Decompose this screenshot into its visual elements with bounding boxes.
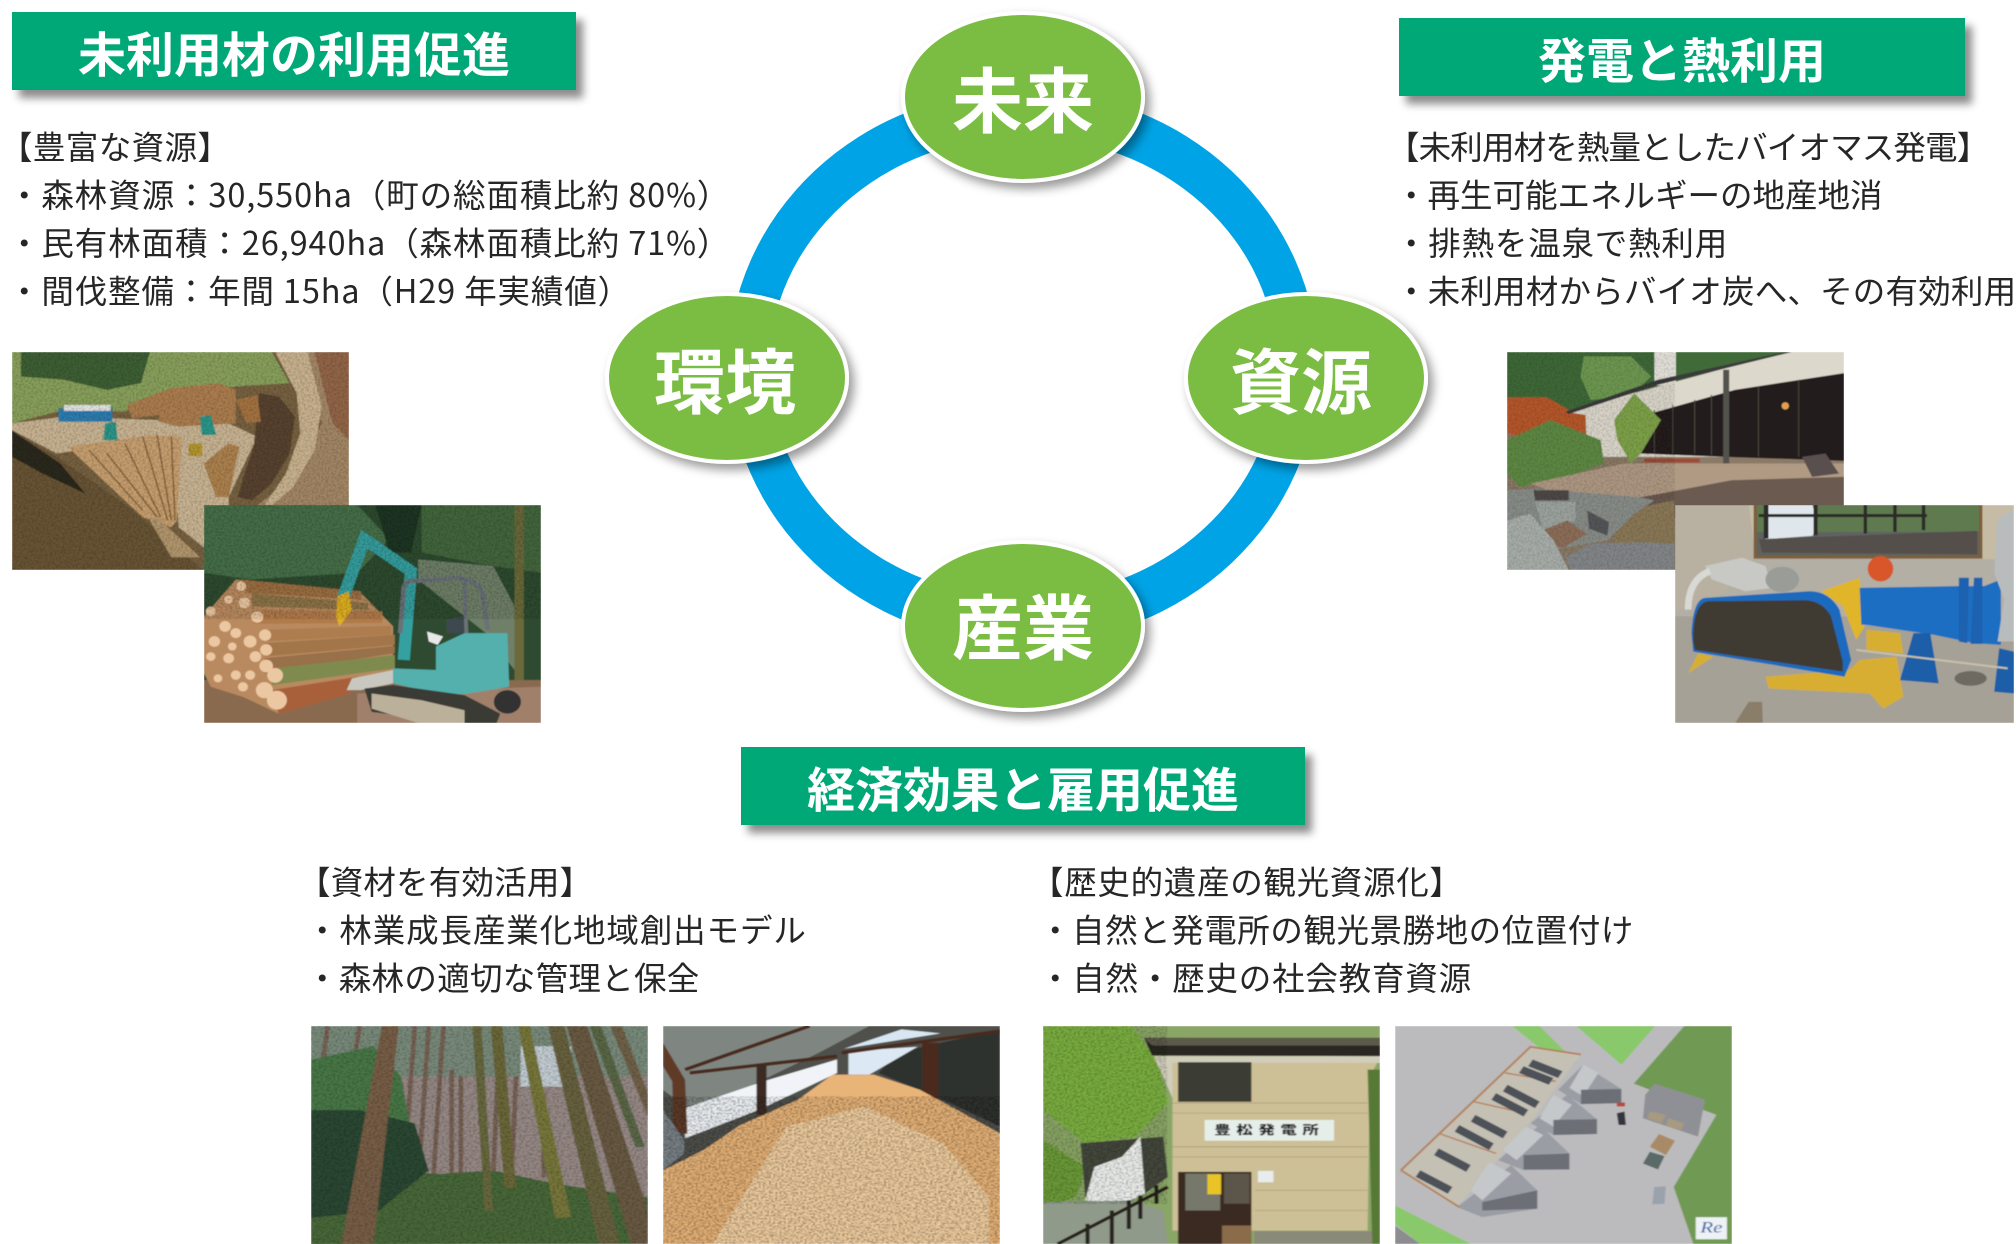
- photo: Toyomatsu power station: 豊松発電所: [1214, 1121, 1324, 1138]
- node: 資源: [1186, 294, 1426, 462]
- node: 産業: [903, 542, 1143, 710]
- photo: logs and teal excavator: [204, 505, 541, 723]
- text block: 資材を有効活用: ・林業成長産業化地域創出モデル: [306, 905, 807, 952]
- text block: 豊富な資源: ・間伐整備：年間 15ha（H29 年実績値）: [8, 266, 631, 313]
- heading: 発電と熱利用: [1399, 18, 1965, 96]
- text block: 歴史的遺産の観光資源化: 【歴史的遺産の観光資源化】: [1031, 857, 1463, 904]
- photo: blue biomass generator machine: [1675, 505, 2014, 723]
- blue ring: [728, 90, 1318, 644]
- text block: 豊富な資源: 【豊富な資源】: [0, 122, 230, 169]
- photo: cedar forest: [311, 1026, 648, 1244]
- text block: バイオマス発電: [1387, 122, 2016, 313]
- text block: 資材を有効活用: [298, 857, 807, 1000]
- text block: 資材を有効活用: ・森林の適切な管理と保全: [306, 953, 700, 1000]
- node: 未来: 未来: [952, 46, 1094, 148]
- text block: バイオマス発電: ・未利用材からバイオ炭へ、その有効利用: [1395, 266, 2016, 313]
- text block: バイオマス発電: 【未利用材を熱量としたバイオマス発電】: [1387, 122, 1988, 169]
- heading: 発電と熱利用: 発電と熱利用: [1538, 22, 1826, 92]
- node: 産業: 産業: [952, 573, 1094, 675]
- panel: central cycle diagram: [604, 10, 1440, 724]
- heading: 未利用材の利用促進: 未利用材の利用促進: [78, 16, 510, 86]
- text block: 豊富な資源: ・森林資源：30,550ha（町の総面積比約 80%）: [8, 170, 730, 217]
- photo: hot spring building and rock garden: [1507, 352, 1844, 570]
- text block: バイオマス発電: ・排熱を温泉で熱利用: [1395, 218, 1728, 265]
- node: 環境: [607, 294, 847, 462]
- node: 環境: 環境: [654, 327, 796, 429]
- node: 資源: 資源: [1230, 327, 1372, 429]
- text block: 歴史的遺産の観光資源化: [1031, 857, 1634, 1000]
- photo: 3D rendering of power plant site: [1395, 1026, 1732, 1244]
- text block: 歴史的遺産の観光資源化: ・自然・歴史の社会教育資源: [1039, 953, 1472, 1000]
- text block: 豊富な資源: ・民有林面積：26,940ha（森林面積比約 71%）: [8, 218, 730, 265]
- text block: 豊富な資源: [0, 122, 730, 313]
- heading: 未利用材の利用促進: [12, 12, 576, 90]
- heading: 経済効果と雇用促進: [741, 747, 1305, 825]
- heading: 経済効果と雇用促進: 経済効果と雇用促進: [807, 751, 1239, 821]
- text block: 資材を有効活用: 【資材を有効活用】: [298, 857, 592, 904]
- text block: 歴史的遺産の観光資源化: ・自然と発電所の観光景勝地の位置付け: [1039, 905, 1634, 952]
- photo: pile of wood chips: [663, 1026, 1000, 1244]
- text block: バイオマス発電: ・再生可能エネルギーの地産地消: [1395, 170, 1883, 217]
- photo: log yard on mountainside: [12, 352, 349, 570]
- node: 未来: [903, 13, 1143, 181]
- photo: Toyomatsu power station: [1043, 1026, 1380, 1244]
- photo: 3D rendering of power plant site: Re: [1699, 1219, 1722, 1236]
